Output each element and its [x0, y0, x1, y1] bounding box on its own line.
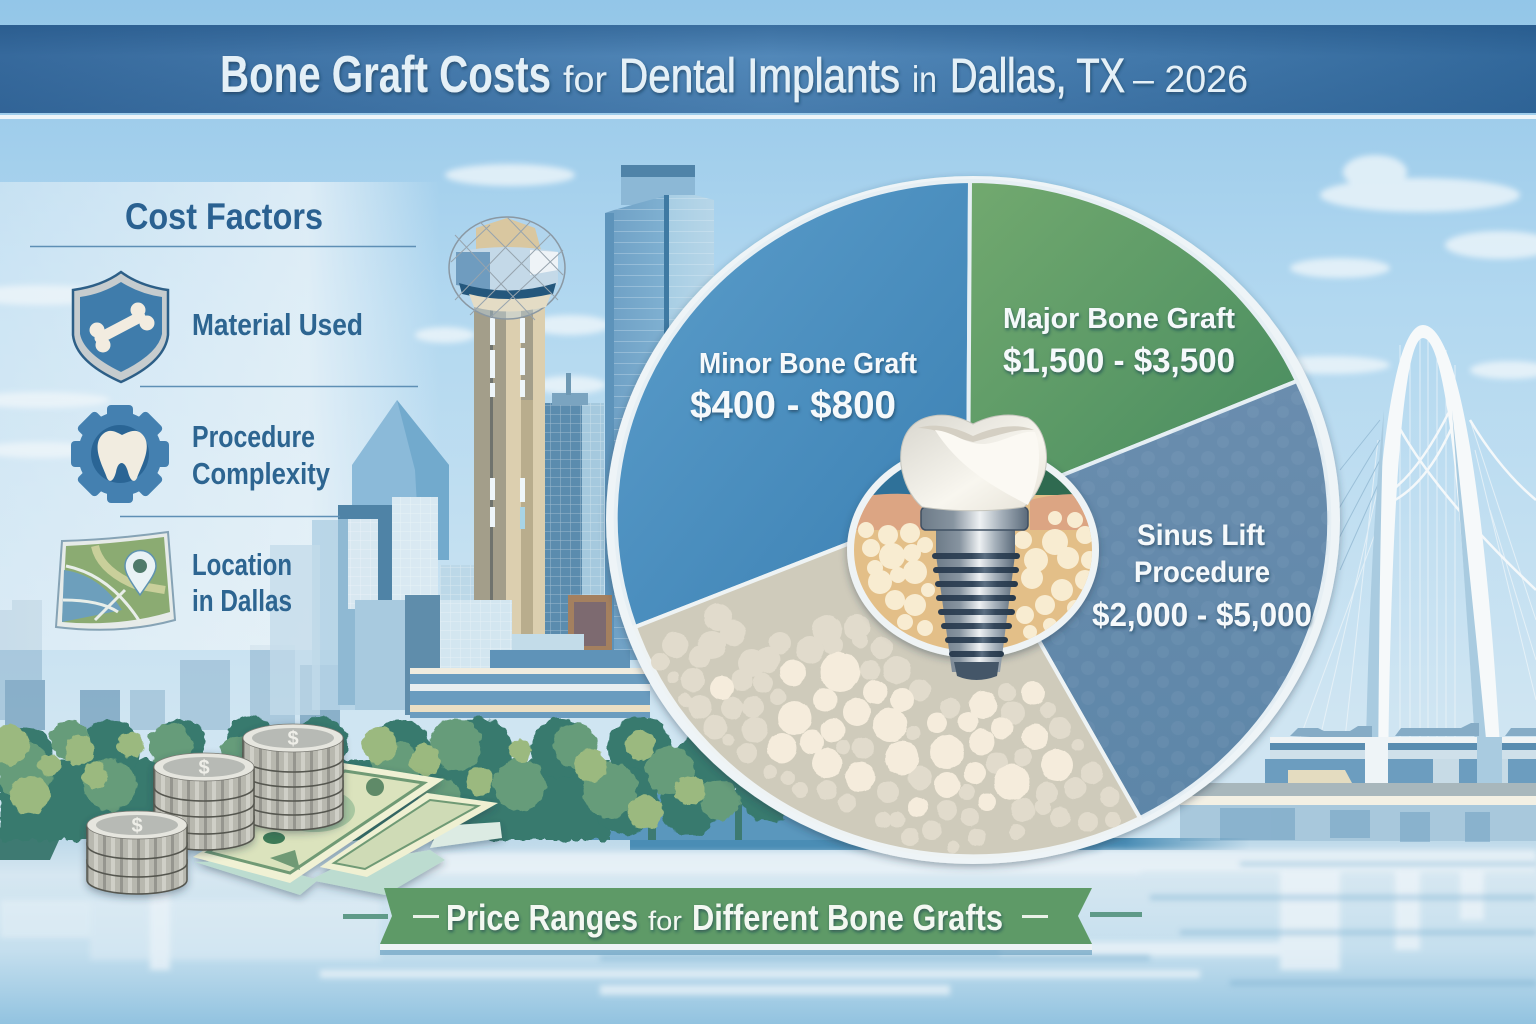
- factor: location in dallas: in Dallas: [192, 583, 292, 618]
- label: sinus lift procedure: [1092, 519, 1312, 633]
- panel: cost factors: [30, 196, 418, 630]
- wedge: major bone graft: [968, 181, 1297, 513]
- icon: gear with tooth: [71, 405, 169, 503]
- title text: Dallas, TX: [950, 50, 1125, 103]
- label: sinus lift procedure: $2,000 - $5,000: [1092, 596, 1312, 633]
- label: major bone graft: [1003, 303, 1235, 380]
- coin stack: rear: [243, 724, 343, 830]
- skyline: distant buildings: [0, 600, 340, 730]
- coin stack: rear: $: [287, 728, 299, 750]
- label: location in dallas: Location: [192, 547, 292, 582]
- title text: in: [912, 59, 937, 100]
- skyline: rear building: [545, 373, 604, 665]
- factor: location in dallas: [56, 532, 292, 630]
- low-rise complex: [410, 595, 650, 718]
- trees: [0, 716, 860, 860]
- label: sinus lift procedure: Procedure: [1134, 556, 1270, 589]
- label: sinus lift procedure: Sinus Lift: [1137, 519, 1265, 552]
- wedge: bone granules: [636, 542, 1142, 854]
- Margaret Hunt Hill Bridge: [1265, 325, 1536, 783]
- factor: material used: [73, 272, 363, 382]
- Reunion Tower: [449, 217, 565, 640]
- banner: price ranges: [343, 888, 1142, 955]
- title text: for: [563, 59, 607, 100]
- coin stack: front: [87, 811, 187, 894]
- icon: shield with bone: [73, 272, 168, 382]
- label: minor bone graft: Minor Bone Graft: [699, 348, 917, 380]
- coin stack: middle: [154, 753, 254, 850]
- heading: cost factors: Cost Factors: [125, 196, 323, 237]
- implant crown: [901, 415, 1046, 511]
- label: material used: Material Used: [192, 307, 363, 342]
- implant screw: [921, 507, 1028, 680]
- title band: [0, 25, 1536, 119]
- label: major bone graft: Major Bone Graft: [1003, 303, 1235, 335]
- label: minor bone graft: $400 - $800: [690, 384, 896, 427]
- label: minor bone graft: [690, 348, 917, 427]
- banner text: [446, 897, 1003, 938]
- factor: procedure complexity: [71, 405, 331, 503]
- clouds: [0, 155, 1536, 458]
- money: coin stacks: [87, 724, 343, 894]
- banner text: for: [648, 906, 682, 936]
- inset: dental implant: [847, 415, 1100, 680]
- wedge: sinus lift procedure: [968, 381, 1329, 818]
- label: major bone graft: $1,500 - $3,500: [1003, 342, 1235, 380]
- money: banknotes: [193, 763, 502, 895]
- skyline: diamond tower: [352, 400, 449, 560]
- factor: procedure complexity: Complexity: [192, 456, 331, 491]
- wedge: minor bone graft: [616, 181, 970, 627]
- water: [0, 783, 1536, 1024]
- banner text: Price Ranges: [446, 897, 638, 938]
- icon: map with pin: [56, 532, 175, 630]
- pie chart: price ranges: [606, 176, 1340, 864]
- coin stack: middle: $: [198, 757, 210, 779]
- panel background: [0, 182, 440, 650]
- title text: [220, 46, 1248, 104]
- label: procedure complexity: Procedure: [192, 419, 315, 454]
- skyline: tall skyscraper: [605, 165, 714, 660]
- skyline: glass buildings: [270, 497, 475, 715]
- title text: Dental Implants: [619, 50, 900, 103]
- title text: – 2026: [1133, 59, 1248, 101]
- title text: Bone Graft Costs: [220, 46, 551, 104]
- coin stack: front: $: [131, 815, 143, 837]
- banner text: Different Bone Grafts: [692, 897, 1003, 938]
